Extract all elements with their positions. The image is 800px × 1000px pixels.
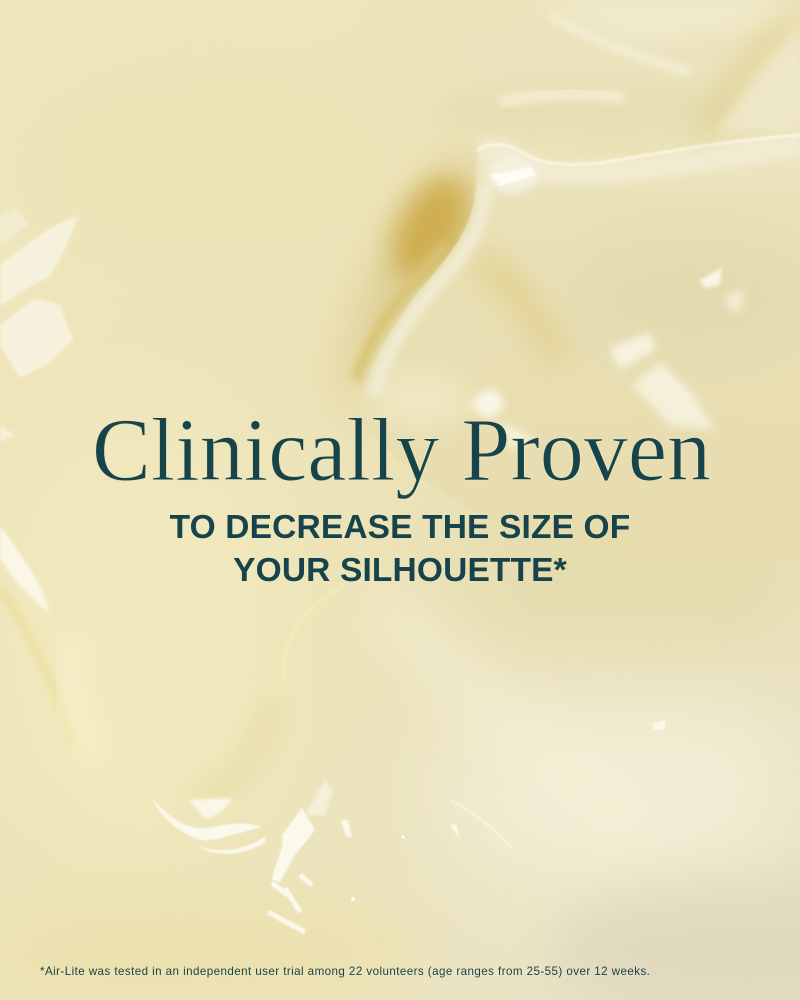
warm streak inside lobe <box>480 260 560 360</box>
cream lobe <box>360 133 800 560</box>
bottom highlights <box>150 796 262 840</box>
footnote: *Air-Lite was tested in an independent user trial among 22 volunteers (age ranges from 25-55) over 12 weeks. <box>40 965 650 978</box>
subtitle: YOUR SILHOUETTE* <box>233 552 567 589</box>
center highlights <box>470 390 505 420</box>
subtitle <box>170 509 630 589</box>
lower folds <box>284 585 345 680</box>
broad tonal areas <box>450 430 800 690</box>
title: Clinically Proven <box>92 401 711 500</box>
lobe rim light <box>374 185 486 395</box>
shadow behind peak <box>345 150 480 410</box>
top right fold <box>715 25 800 130</box>
subtitle: TO DECREASE THE SIZE OF <box>170 509 630 546</box>
left glossy highlights <box>0 216 78 306</box>
